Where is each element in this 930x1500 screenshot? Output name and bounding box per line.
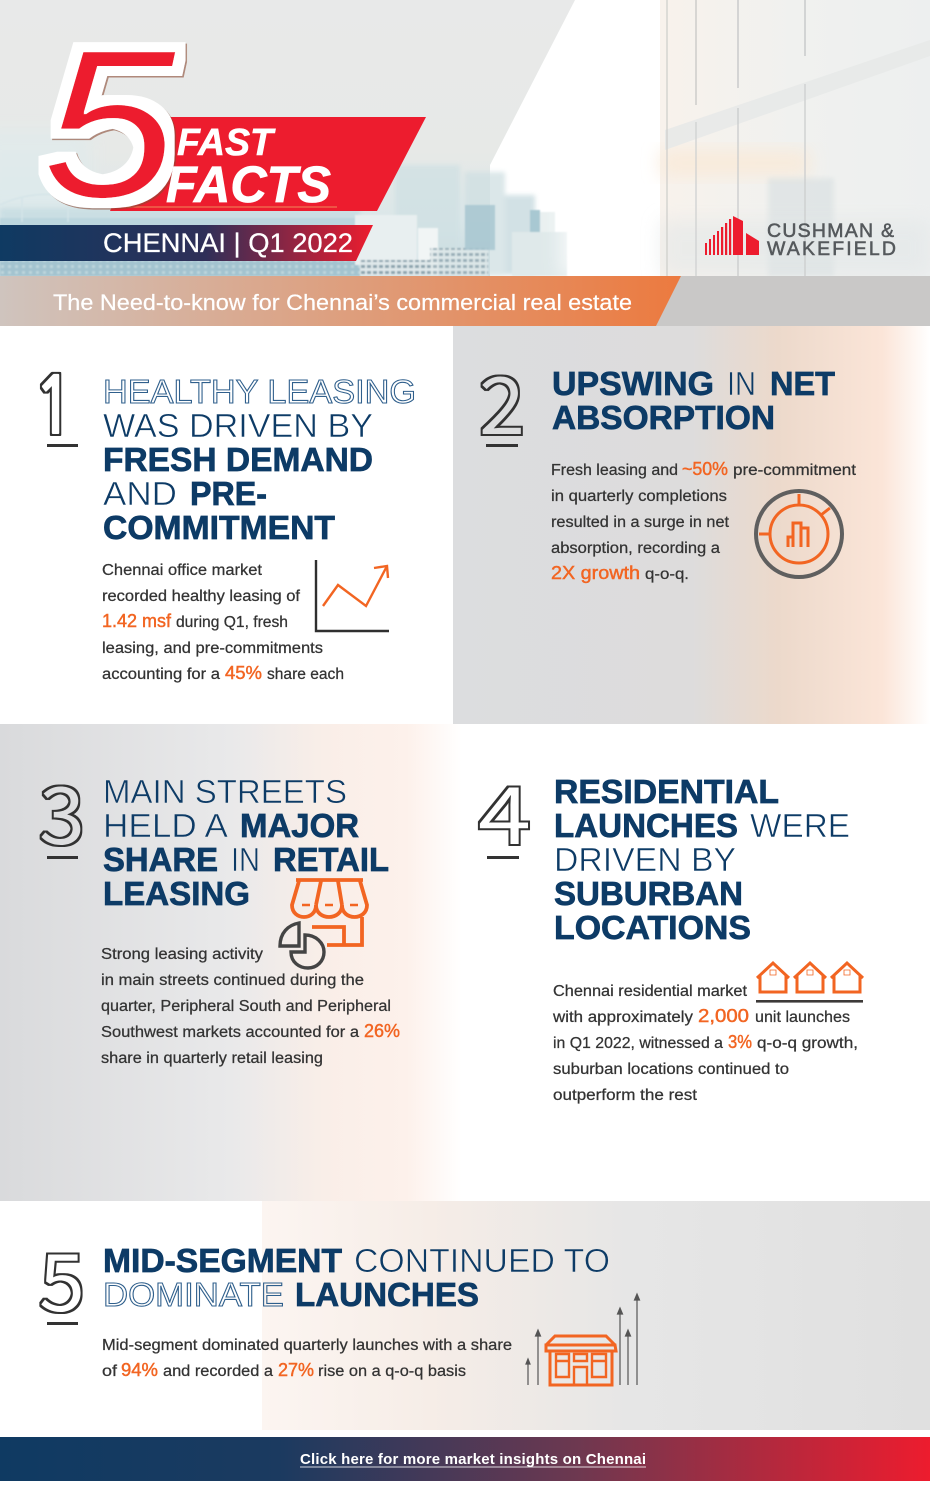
body text 3: share in quarterly retail leasing: [101, 1050, 323, 1067]
body text 1: [102, 562, 344, 683]
heading 5: DOMINATE: [103, 1276, 284, 1313]
body text 1: 45%: [225, 663, 262, 683]
light beam: [490, 0, 670, 276]
body text 4: with approximately: [552, 1009, 693, 1026]
heading 4: LAUNCHES: [554, 807, 738, 844]
heading 3: SHARE: [103, 841, 218, 878]
body text 1: during Q1, fresh: [176, 614, 288, 631]
window: [660, 0, 930, 276]
body text 3: in main streets continued during the: [101, 972, 364, 989]
body text 3: Southwest markets accounted for a: [101, 1024, 359, 1041]
body text 4: 3%: [728, 1032, 752, 1052]
icon: red building: [705, 216, 759, 255]
heading 4: DRIVEN BY: [554, 841, 736, 878]
body text 2: pre-commitment: [733, 462, 857, 479]
heading 3: LEASING: [103, 875, 250, 912]
heading 4: WERE: [750, 807, 850, 844]
body text 5: of: [102, 1363, 118, 1380]
number 4: 4: [478, 752, 531, 867]
body text 2: q-o-q.: [645, 566, 689, 583]
body text 2: absorption, recording a: [551, 540, 720, 557]
icon: three houses: [756, 963, 863, 1003]
body text 2: ~50%: [682, 459, 728, 479]
body text 1: Chennai office market: [102, 562, 263, 579]
heading 4: [554, 773, 850, 946]
number 3: 3: [39, 752, 85, 867]
body text 1: leasing, and pre-commitments: [102, 640, 323, 657]
body text 1: recorded healthy leasing of: [102, 588, 301, 605]
heading 3: RETAIL: [273, 841, 389, 878]
heading 5: MID-SEGMENT: [103, 1242, 342, 1279]
body text 5: and recorded a: [163, 1363, 273, 1380]
body text 4: suburban locations continued to: [553, 1061, 789, 1078]
heading 3: IN: [231, 841, 260, 878]
body text 4: in Q1 2022, witnessed a: [553, 1035, 723, 1052]
body text 5: Mid-segment dominated quarterly launches with a share: [102, 1337, 512, 1354]
body text 2: in quarterly completions: [551, 488, 727, 505]
body text 4: Chennai residential market: [553, 983, 748, 1000]
heading 3: HELD A: [103, 807, 228, 844]
heading 4: RESIDENTIAL: [554, 773, 779, 810]
location bar: CHENNAI | Q1 2022: [103, 228, 353, 258]
body text 5: [102, 1337, 512, 1380]
panel: fact 5: [0, 1201, 930, 1430]
heading 1: FRESH DEMAND: [103, 441, 373, 478]
FACTS: FACTS: [166, 156, 331, 213]
body text 2: 2X growth: [551, 563, 640, 583]
body text 3: 26%: [364, 1021, 400, 1041]
body text 2: resulted in a surge in net: [551, 514, 730, 531]
heading 1: [103, 373, 416, 546]
panel: fact 2: [453, 326, 930, 724]
heading 5: [103, 1242, 610, 1313]
body text 3: quarter, Peripheral South and Peripheral: [101, 998, 391, 1015]
heading 1: COMMITMENT: [103, 509, 335, 546]
icon: dial with bars: [756, 491, 842, 577]
FAST: FAST: [177, 122, 276, 164]
heading 5: LAUNCHES: [295, 1276, 479, 1313]
icon: building with rising arrows: [526, 1294, 640, 1385]
body text 4: [552, 983, 858, 1104]
location bar: [0, 225, 373, 261]
body text 2: Fresh leasing and: [551, 462, 678, 479]
logo: Cushman & Wakefield: WAKEFIELD: [767, 238, 896, 260]
heading 2: ABSORPTION: [552, 399, 775, 436]
body text 5: rise on a q-o-q basis: [318, 1363, 466, 1380]
heading 3: MAIN STREETS: [103, 773, 347, 810]
skyline: [0, 165, 660, 276]
body text 3: [101, 946, 400, 1067]
body text 1: accounting for a: [102, 666, 220, 683]
subtitle band: The Need-to-know for Chennai’s commercial real estate: [53, 290, 632, 315]
heading 5: CONTINUED TO: [354, 1242, 610, 1279]
panel: fact 1: [0, 326, 453, 724]
heading 1: PRE-: [190, 475, 267, 512]
subtitle band: [0, 276, 930, 326]
red banner: [110, 117, 426, 211]
logo: Cushman & Wakefield: CUSHMAN &: [767, 220, 894, 242]
header photo background: [0, 0, 930, 276]
heading 2: UPSWING: [552, 365, 714, 402]
large numeral 5: 5: [42, 5, 177, 242]
icon: growth chart: [316, 560, 389, 631]
heading 3: [103, 773, 389, 912]
body text 1: share each: [267, 666, 344, 683]
body text 1: 1.42 msf: [102, 611, 172, 631]
icon: storefront with pie chart: [280, 880, 367, 968]
body text 4: outperform the rest: [553, 1087, 698, 1104]
heading 4: SUBURBAN: [554, 875, 743, 912]
logo: Cushman & Wakefield: [705, 216, 896, 260]
body text 3: Strong leasing activity: [101, 946, 263, 963]
body text 4: unit launches: [755, 1009, 850, 1026]
heading 2: [552, 365, 835, 436]
number 5: 5: [39, 1219, 85, 1334]
body text 5: 94%: [121, 1360, 158, 1380]
body text 4: 2,000: [698, 1006, 749, 1026]
footer link bar: [0, 1437, 930, 1481]
title badge: 5 Fast Facts: [42, 5, 426, 242]
heading 2: NET: [770, 365, 835, 402]
body text 5: 27%: [278, 1360, 314, 1380]
heading 1: HEALTHY LEASING: [103, 373, 416, 410]
heading 3: MAJOR: [240, 807, 359, 844]
number 1: 1: [33, 368, 75, 446]
panel: fact 4: [462, 724, 930, 1201]
footer link bar: Click here for more market insights on Chennai: [300, 1451, 646, 1468]
body text 2: [551, 459, 857, 583]
heading 4: LOCATIONS: [554, 909, 751, 946]
panel: fact 3: [0, 724, 462, 1201]
body text 4: q-o-q growth,: [757, 1035, 858, 1052]
number 2: 2: [479, 342, 525, 457]
heading 2: IN: [727, 365, 756, 402]
heading 1: WAS DRIVEN BY: [103, 407, 373, 444]
heading 1: AND: [103, 475, 177, 512]
